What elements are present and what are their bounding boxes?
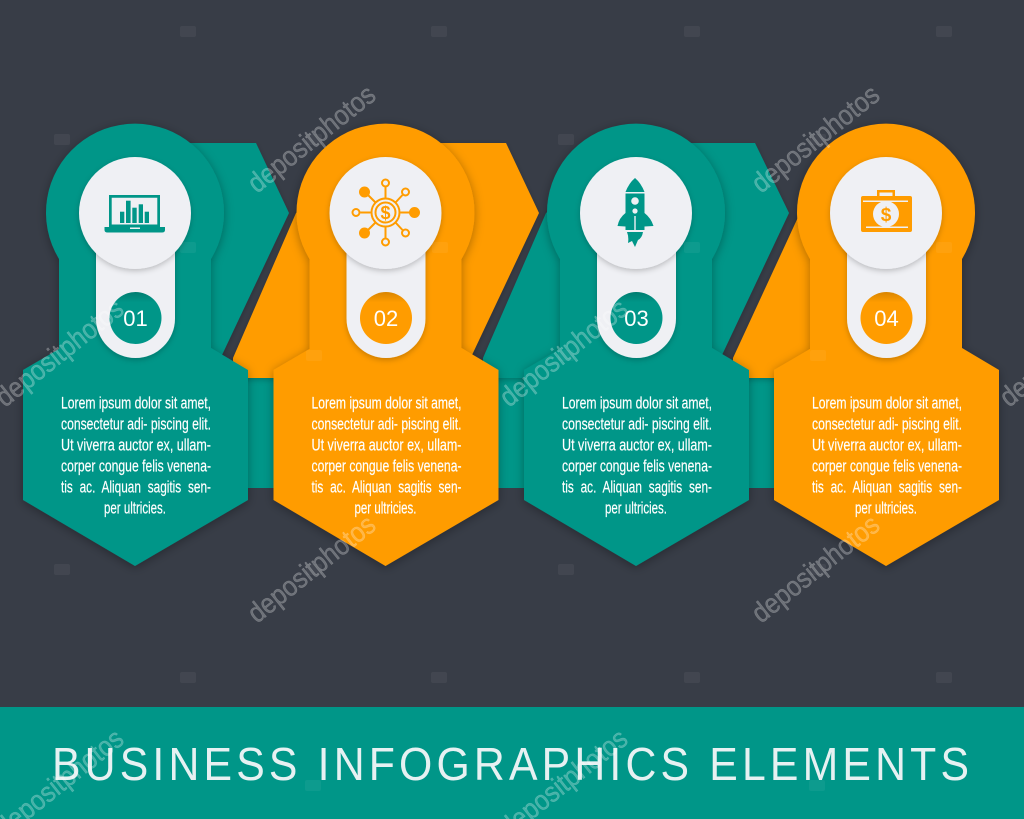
text block: per ultricies. — [354, 498, 416, 518]
text block — [562, 394, 712, 518]
panel: step 04 — [774, 124, 999, 566]
card body — [524, 124, 749, 566]
text block: tis ac. Aliquan sagitis sen- — [562, 478, 712, 496]
card body — [274, 124, 498, 566]
number pill — [346, 213, 426, 358]
text block: corper congue felis venena- — [562, 456, 712, 476]
teal connecting band — [135, 378, 775, 488]
text block: consectetur adi- piscing elit. — [812, 414, 962, 434]
text block: per ultricies. — [855, 498, 917, 518]
text block: Lorem ipsum dolor sit amet, — [312, 394, 462, 412]
title band — [0, 707, 1024, 819]
text block: per ultricies. — [605, 498, 667, 518]
icon: laptop chart — [104, 195, 165, 232]
icon: money case — [861, 190, 912, 232]
icon: dollar network: $ — [380, 203, 391, 223]
text block — [812, 394, 962, 518]
text block: corper congue felis venena- — [812, 456, 962, 476]
text block: tis ac. Aliquan sagitis sen- — [812, 478, 962, 496]
text block: Ut viverra auctor ex, ullam- — [312, 436, 462, 454]
number: 01 — [123, 306, 148, 331]
text block: consectetur adi- piscing elit. — [61, 414, 211, 434]
number: 04 — [874, 306, 899, 331]
panel: step 02 — [274, 124, 498, 566]
text block: Ut viverra auctor ex, ullam- — [562, 436, 712, 454]
arrow: step 1 back shape — [135, 143, 289, 378]
text block — [61, 394, 211, 518]
text block: tis ac. Aliquan sagitis sen- — [312, 478, 462, 496]
watermarks: depositphotos — [241, 79, 381, 199]
panel: step 03 — [524, 124, 749, 566]
icon disc — [580, 157, 692, 269]
number circle — [110, 292, 162, 344]
number circle — [610, 292, 662, 344]
watermarks: depositphotos — [493, 293, 633, 413]
panel: step 01 — [23, 124, 248, 566]
text block: Lorem ipsum dolor sit amet, — [61, 394, 211, 412]
number circle — [360, 292, 412, 344]
icon disc — [830, 157, 942, 269]
text block: consectetur adi- piscing elit. — [312, 414, 462, 434]
text block: Ut viverra auctor ex, ullam- — [61, 436, 211, 454]
card body — [774, 124, 999, 566]
number pill — [847, 213, 926, 358]
text block: corper congue felis venena- — [312, 456, 462, 476]
number: 03 — [624, 306, 649, 331]
title: BUSINESS INFOGRAPHICS ELEMENTS — [52, 740, 969, 790]
text block: consectetur adi- piscing elit. — [562, 414, 712, 434]
text block: tis ac. Aliquan sagitis sen- — [61, 478, 211, 496]
icon: dollar network — [352, 180, 419, 246]
text block: Lorem ipsum dolor sit amet, — [562, 394, 712, 412]
number pill — [597, 213, 676, 358]
number circle — [860, 292, 912, 344]
text block: Lorem ipsum dolor sit amet, — [812, 394, 962, 412]
arrow: step 4 back shape — [733, 200, 886, 378]
card body — [23, 124, 248, 566]
watermarks: depositphotos — [241, 509, 381, 629]
arrow: step 2 back shape — [233, 143, 539, 378]
icon: money case: $ — [881, 205, 892, 226]
watermarks: depositphotos — [745, 509, 885, 629]
number: 02 — [374, 306, 398, 331]
icon: rocket — [618, 178, 654, 247]
text block: per ultricies. — [104, 498, 166, 518]
icon disc — [79, 157, 191, 269]
arrow: step 3 back shape — [483, 143, 789, 378]
text block — [312, 394, 462, 518]
text block: Ut viverra auctor ex, ullam- — [812, 436, 962, 454]
number pill — [96, 213, 175, 358]
icon disc — [330, 157, 442, 269]
watermarks: depositphotos — [745, 79, 885, 199]
text block: corper congue felis venena- — [61, 456, 211, 476]
